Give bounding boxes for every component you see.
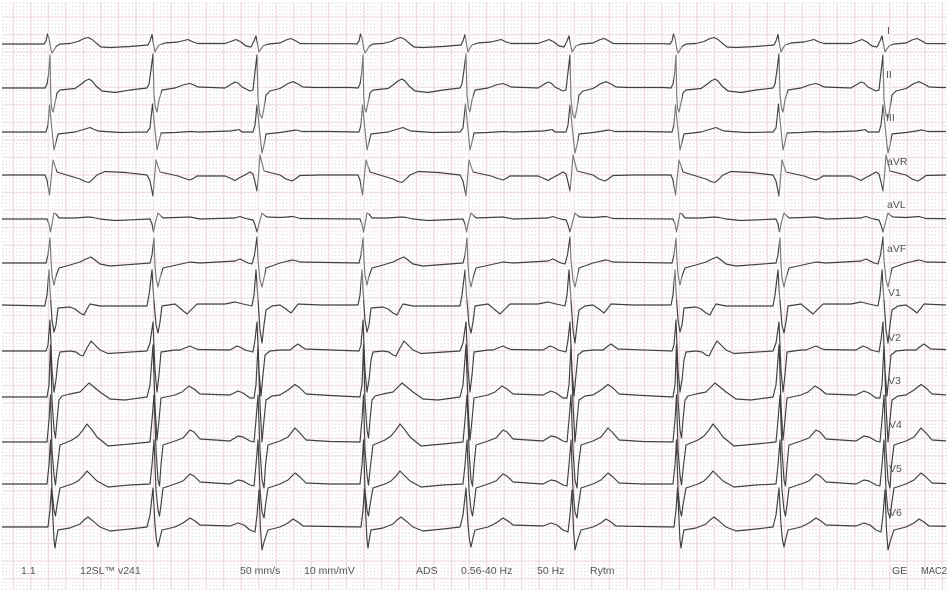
footer: recording settings: GE (892, 565, 907, 577)
lead aVF trace (2, 237, 949, 287)
lead labels: aVL (887, 199, 906, 211)
lead V6 trace (2, 488, 949, 550)
lead III trace (2, 104, 949, 153)
lead labels (886, 25, 908, 519)
lead labels: I (887, 25, 890, 37)
lead aVL trace (2, 213, 949, 232)
lead labels: V1 (888, 287, 901, 299)
footer: recording settings: ADS (416, 565, 438, 577)
lead labels: aVF (887, 243, 906, 255)
lead V3 trace (2, 345, 949, 442)
lead I trace (2, 34, 949, 53)
lead labels: V2 (888, 332, 901, 344)
lead V5 trace (2, 440, 949, 518)
lead labels: V6 (889, 507, 902, 519)
lead aVR trace (2, 155, 949, 196)
footer: recording settings: 12SL™ v241 (80, 565, 141, 577)
lead labels: III (886, 112, 895, 124)
footer: recording settings: 50 mm/s (240, 565, 280, 577)
footer: recording settings (21, 565, 947, 577)
lead V1 trace (2, 270, 949, 343)
lead labels: V5 (889, 463, 902, 475)
footer: recording settings: 1.1 (21, 565, 36, 577)
lead labels: V4 (889, 419, 902, 431)
lead labels: II (886, 69, 892, 81)
footer: recording settings: Rytm (590, 565, 615, 577)
lead V4 trace (2, 395, 949, 488)
footer: recording settings: 0.56-40 Hz (461, 565, 512, 577)
footer: recording settings: 10 mm/mV (304, 565, 355, 577)
lead II trace (2, 54, 949, 118)
lead labels: aVR (887, 156, 908, 168)
footer: recording settings: 50 Hz (537, 565, 564, 577)
lead V2 trace (2, 320, 949, 396)
lead labels: V3 (888, 375, 901, 387)
